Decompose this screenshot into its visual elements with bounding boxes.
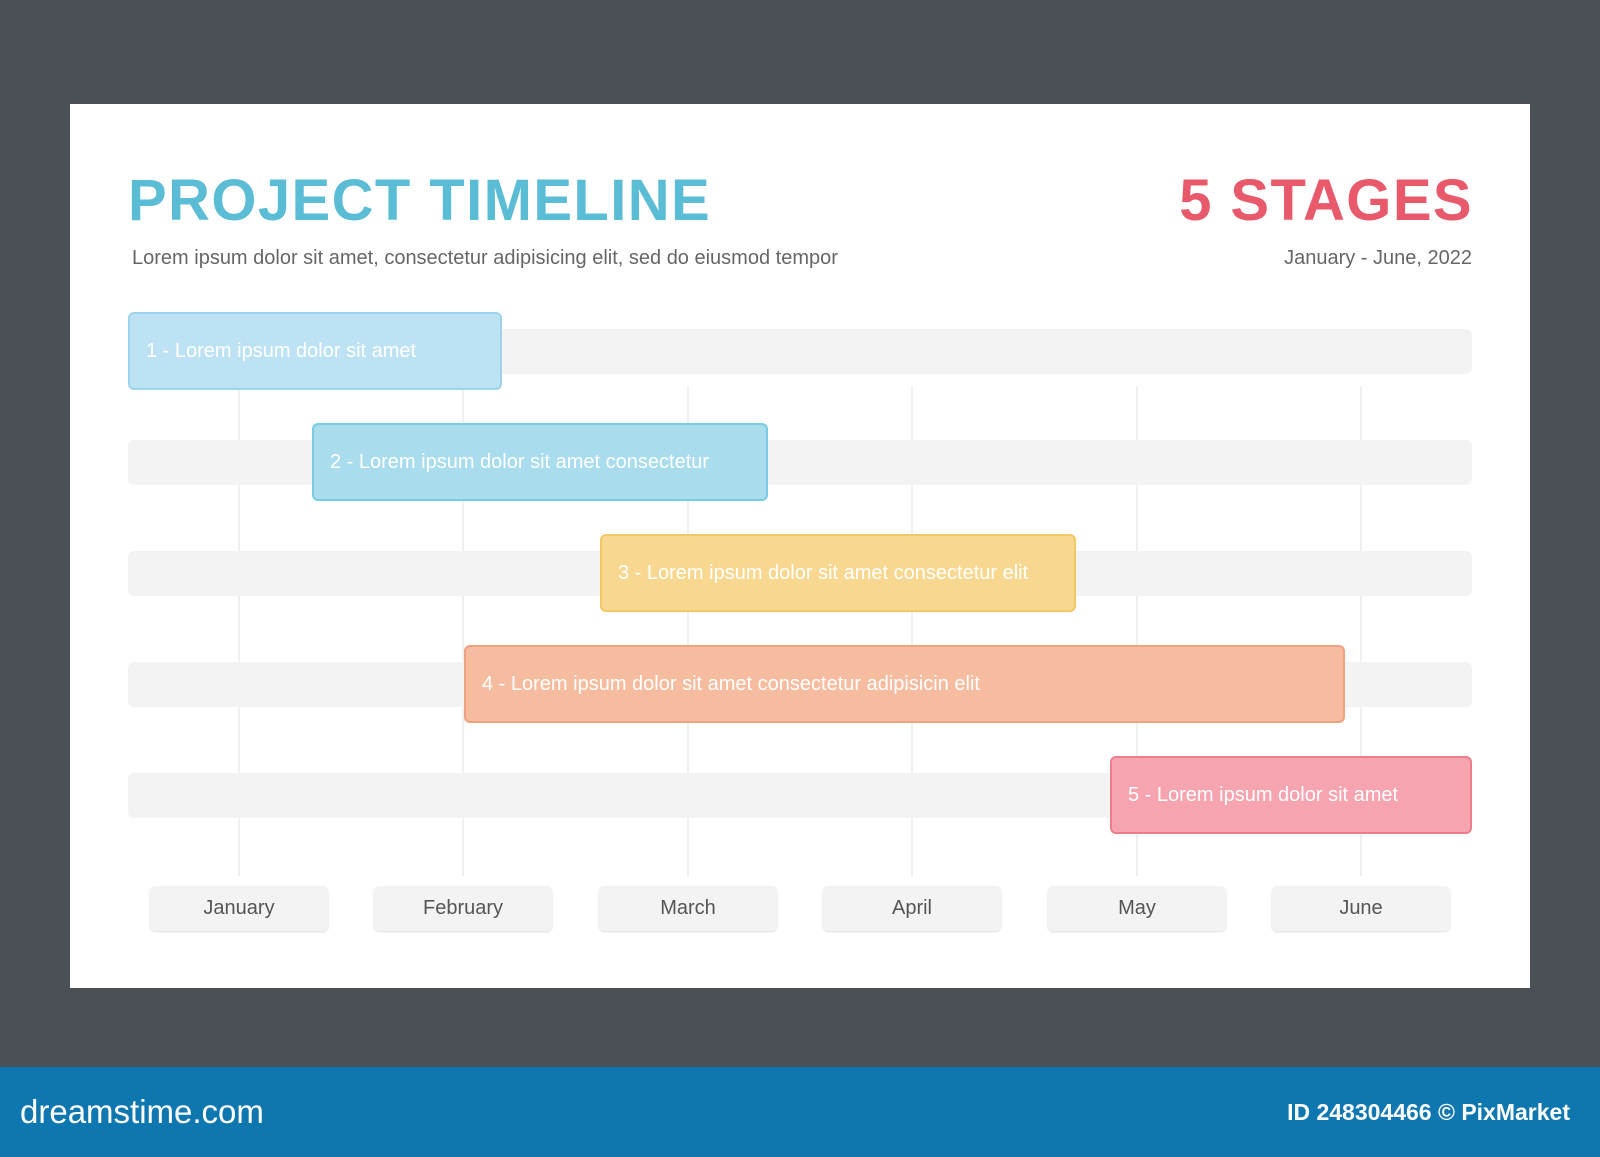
month labels: February — [423, 897, 503, 919]
month labels: March — [660, 897, 716, 919]
month labels: January — [203, 897, 275, 919]
bar: stage 5: 5 - Lorem ipsum dolor sit amet — [1128, 784, 1398, 806]
title: PROJECT TIMELINE — [128, 168, 711, 233]
date range: January - June, 2022 — [1284, 247, 1472, 269]
footer logo: dreamstime.com — [20, 1093, 264, 1130]
footer bar — [0, 1067, 1600, 1157]
month labels: May — [1118, 897, 1156, 919]
bar: stage 1: 1 - Lorem ipsum dolor sit amet — [146, 340, 416, 362]
bar: stage 2 — [312, 423, 768, 501]
bar: stage 2: 2 - Lorem ipsum dolor sit amet consectetur — [330, 451, 709, 473]
bar: stage 4: 4 - Lorem ipsum dolor sit amet consectetur adipisicin elit — [482, 673, 980, 695]
bar: stage 3 — [600, 534, 1076, 612]
month labels: June — [1339, 897, 1383, 919]
bar: stage 5 — [1110, 756, 1472, 834]
bar: stage 1 — [128, 312, 502, 390]
bar: stage 3: 3 - Lorem ipsum dolor sit amet consectetur elit — [618, 562, 1028, 584]
subtitle: Lorem ipsum dolor sit amet, consectetur adipisicing elit, sed do eiusmod tempor — [132, 247, 838, 269]
panel: card — [70, 104, 1530, 988]
bar: stage 4 — [464, 645, 1345, 723]
month labels — [150, 886, 1450, 932]
footer id: ID 248304466 © PixMarket — [1287, 1099, 1570, 1125]
month labels: April — [892, 897, 932, 919]
stages heading: 5 STAGES — [1179, 168, 1473, 233]
